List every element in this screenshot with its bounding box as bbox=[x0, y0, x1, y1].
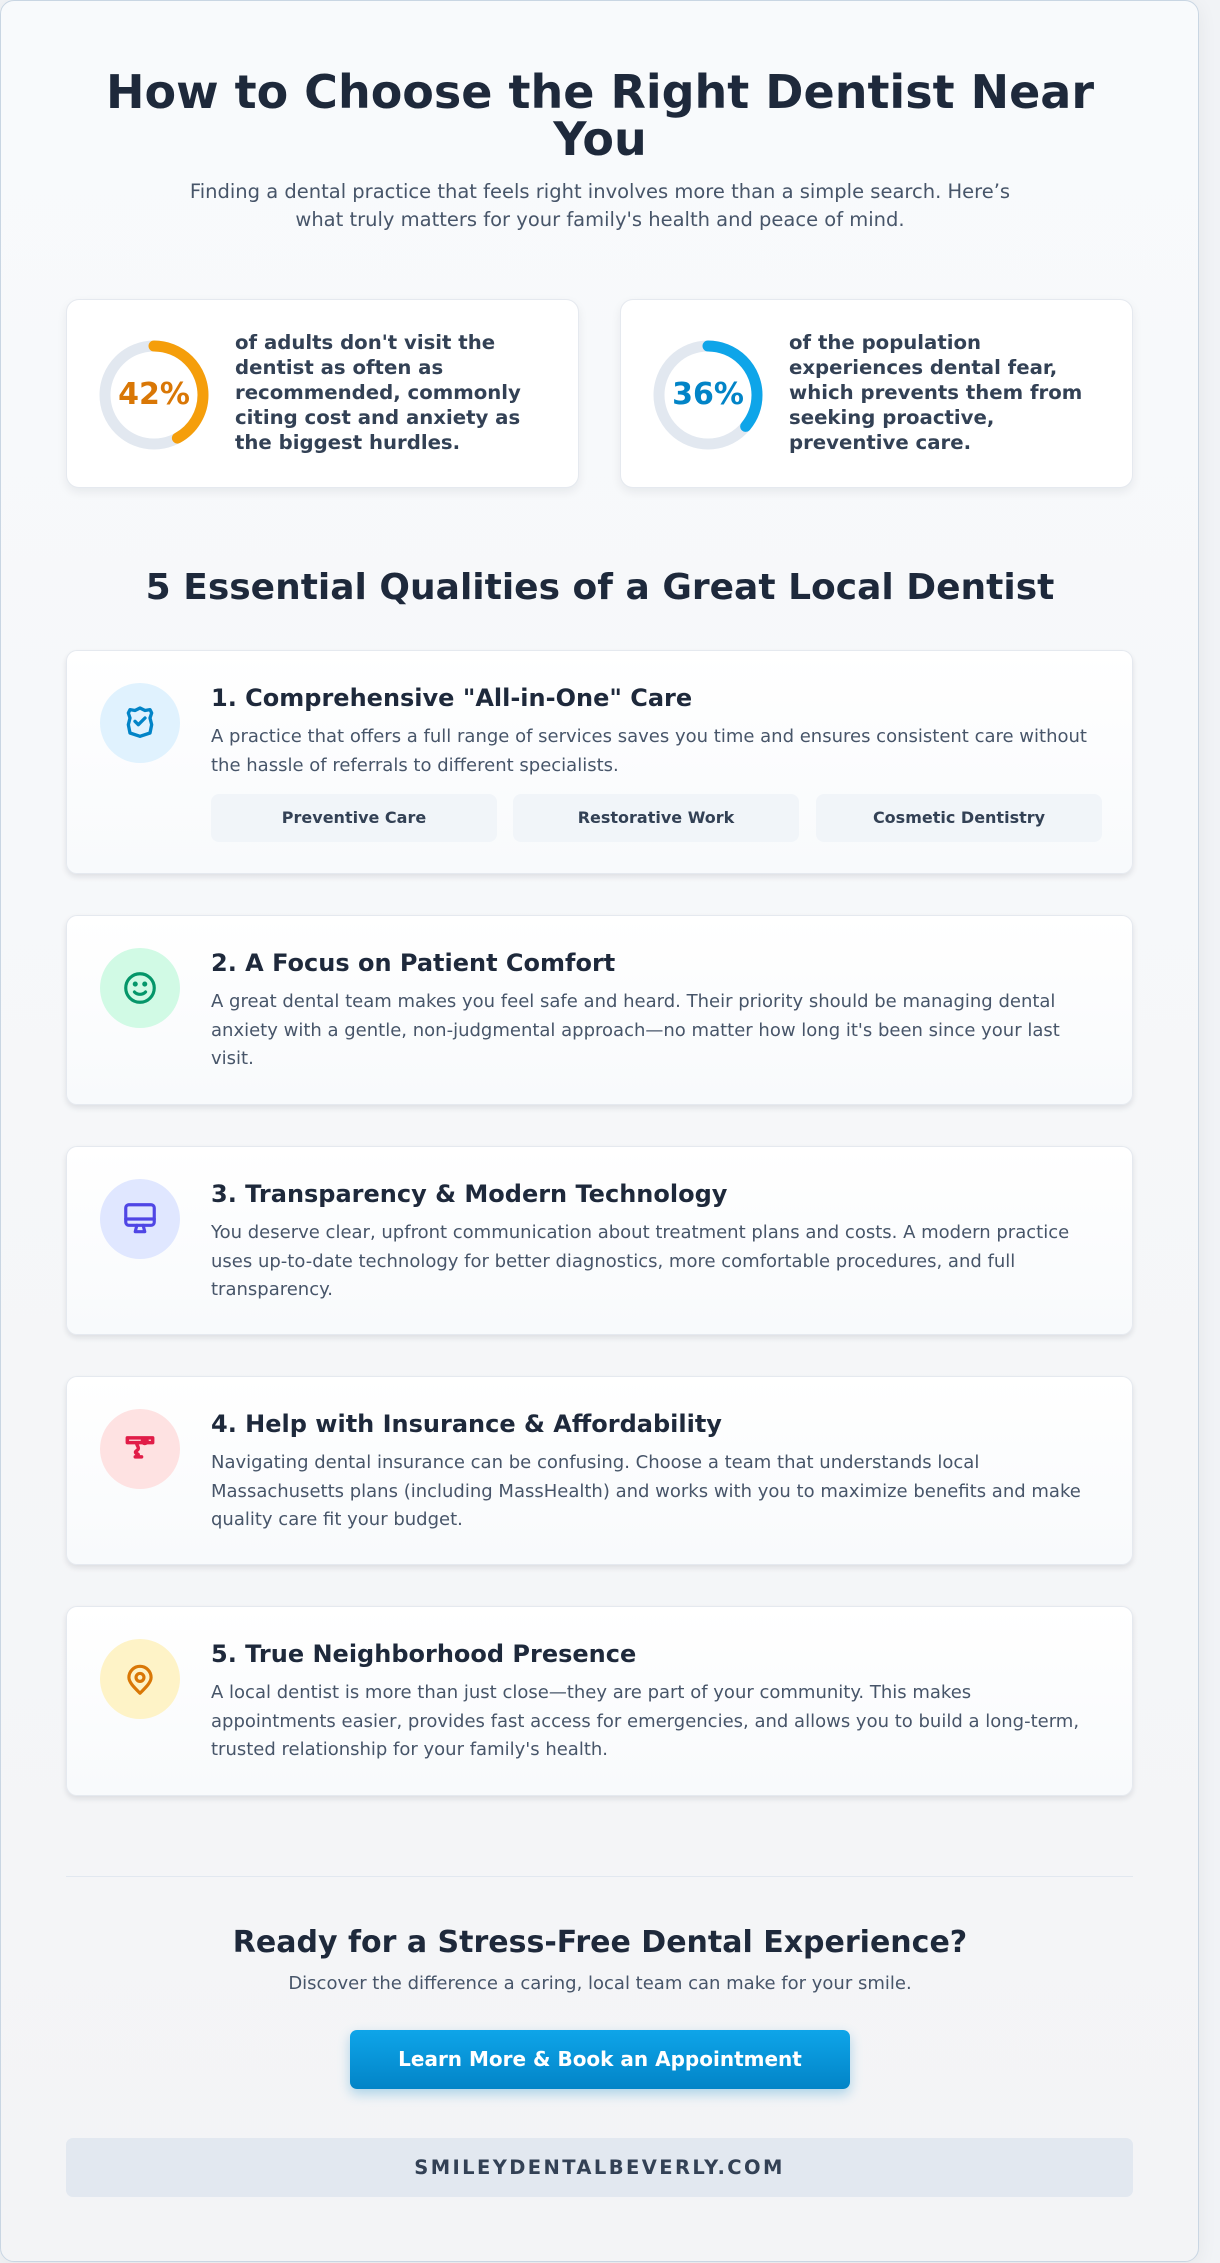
stat card: 36% bbox=[620, 299, 1133, 488]
stat text: of the population experiences dental fear, which prevents them from seeking proactive, preventive care. bbox=[789, 331, 1082, 454]
donut chart 42% bbox=[100, 340, 208, 450]
icon: monitor bbox=[100, 1179, 180, 1259]
stat number: 42% bbox=[118, 377, 190, 412]
card 2: patient comfort bbox=[66, 915, 1133, 1105]
card title: 1. Comprehensive "All-in-One" Care bbox=[211, 684, 692, 712]
card 5: neighborhood bbox=[66, 1606, 1133, 1796]
CTA button: Learn More & Book an Appointment bbox=[398, 2047, 802, 2071]
stat card: 42% bbox=[66, 299, 579, 488]
card description: Navigating dental insurance can be confusing. Choose a team that understands local Massachusetts plans (including MassHealth) and works with you to maximize benefits and make quality care fit your budget. bbox=[211, 1452, 1081, 1530]
card description: You deserve clear, upfront communication about treatment plans and costs. A modern practice uses up-to-date technology for better diagnostics, more comfortable procedures, and full transparency. bbox=[211, 1222, 1069, 1300]
tag: restorative: Restorative Work bbox=[578, 808, 734, 827]
footer website bar: SMILEYDENTALBEVERLY.COM bbox=[414, 2156, 785, 2179]
tag: cosmetic: Cosmetic Dentistry bbox=[873, 808, 1045, 827]
tag: restorative bbox=[513, 794, 799, 842]
tag: cosmetic bbox=[816, 794, 1102, 842]
title: How to Choose the Right Dentist Near You bbox=[106, 65, 1094, 166]
icon: smile bbox=[100, 948, 180, 1028]
card title: 5. True Neighborhood Presence bbox=[211, 1640, 636, 1668]
card description: A local dentist is more than just close—they are part of your community. This makes appointments easier, provides fast access for emergencies, and allows you to build a long-term, trusted relationship for your family's health. bbox=[211, 1682, 1079, 1760]
card title: 4. Help with Insurance & Affordability bbox=[211, 1410, 722, 1438]
card title: 3. Transparency & Modern Technology bbox=[211, 1180, 727, 1208]
CTA subtext: Discover the difference a caring, local team can make for your smile. bbox=[288, 1973, 912, 1994]
tag: preventive: Preventive Care bbox=[282, 808, 426, 827]
stat number: 36% bbox=[672, 377, 744, 412]
card description: A great dental team makes you feel safe and heard. Their priority should be managing dental anxiety with a gentle, non-judgmental approach—no matter how long it's been since your last visit. bbox=[211, 991, 1060, 1069]
icon: location pin bbox=[100, 1639, 180, 1719]
card 4: insurance bbox=[66, 1376, 1133, 1565]
footer website bar bbox=[66, 2138, 1133, 2197]
stat text: of adults don't visit the dentist as often as recommended, commonly citing cost and anxiety as the biggest hurdles. bbox=[235, 331, 521, 454]
donut chart 36% bbox=[654, 340, 762, 450]
subtitle: Finding a dental practice that feels right involves more than a simple search. Here’s what truly matters for your family's health and peace of mind. bbox=[190, 180, 1010, 231]
icon: insurance bbox=[100, 1409, 180, 1489]
section heading: 5 Essential Qualities of a Great Local Dentist bbox=[146, 567, 1054, 608]
CTA button bbox=[350, 2030, 850, 2089]
icon: shield check bbox=[100, 683, 180, 763]
card 3: transparency bbox=[66, 1146, 1133, 1335]
card title: 2. A Focus on Patient Comfort bbox=[211, 949, 615, 977]
tag: preventive bbox=[211, 794, 497, 842]
card description: A practice that offers a full range of services saves you time and ensures consistent care without the hassle of referrals to different specialists. bbox=[211, 726, 1087, 776]
CTA heading: Ready for a Stress-Free Dental Experience? bbox=[233, 1925, 967, 1960]
card 1: comprehensive care bbox=[66, 650, 1133, 874]
